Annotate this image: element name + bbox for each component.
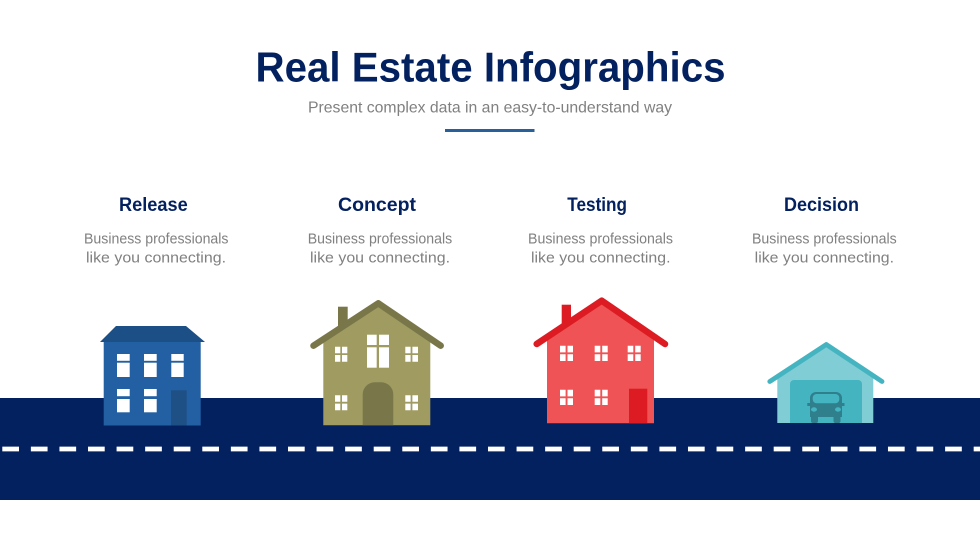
text block: concept description: [308, 230, 452, 267]
icon: olive house: [314, 303, 441, 425]
title: Real Estate Infographics: [256, 44, 726, 91]
icon: red house: [537, 301, 665, 423]
text block: decision description: [752, 230, 897, 267]
icon: teal garage with car: [770, 344, 882, 423]
heading: concept: Concept: [338, 194, 417, 216]
text block: testing description: [528, 230, 673, 267]
heading: release: Release: [119, 194, 188, 216]
heading: testing: Testing: [567, 194, 627, 216]
panel: release: [84, 194, 228, 426]
text block: testing description: like you connecting.: [531, 250, 670, 267]
panel: testing: [528, 194, 673, 423]
subtitle: Present complex data in an easy-to-understand way: [308, 100, 672, 116]
icon: car: [807, 392, 844, 423]
panel: decision: [752, 194, 897, 423]
icon: blue apartment building: [100, 326, 205, 426]
text block: release description: like you connecting.: [86, 250, 226, 267]
text block: release description: Business professionals: [84, 230, 228, 247]
text block: concept description: like you connecting.: [310, 250, 450, 267]
text block: decision description: like you connecting.: [755, 250, 894, 267]
text block: decision description: Business professionals: [752, 230, 897, 247]
panel: concept: [308, 194, 452, 425]
title underline accent: [445, 129, 534, 132]
text block: release description: [84, 230, 228, 267]
text block: concept description: Business professionals: [308, 230, 452, 247]
heading: decision: Decision: [784, 194, 859, 216]
road: [0, 398, 980, 500]
text block: testing description: Business professionals: [528, 230, 673, 247]
